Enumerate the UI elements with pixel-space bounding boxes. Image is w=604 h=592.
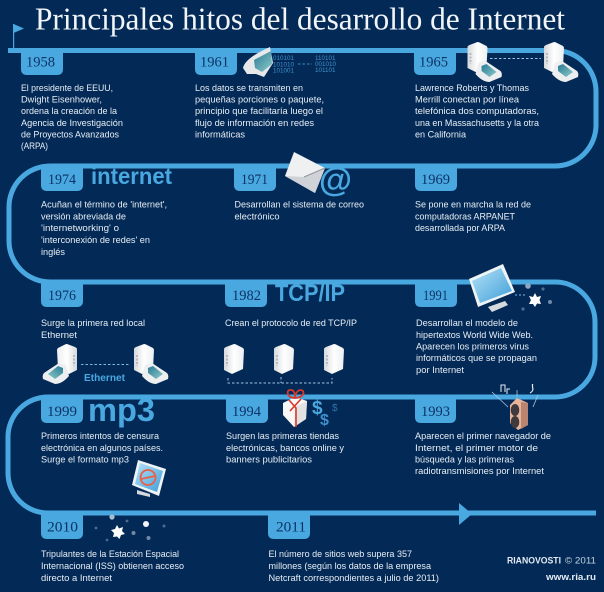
text block 1969: Se pone en marcha la red de bbox=[415, 200, 531, 210]
text block 1976: Surge la primera red local bbox=[41, 318, 145, 329]
text block 1993 bbox=[415, 431, 551, 477]
text block 1991: Aparecen los primeros virus bbox=[416, 342, 529, 352]
text block 1994: banners publicitarios bbox=[226, 454, 312, 466]
text block 2010: directo a Internet bbox=[41, 573, 112, 584]
text block 1958: Dwight Eisenhower, bbox=[21, 94, 102, 106]
credit: RIA Novosti: © 2011 bbox=[565, 556, 596, 566]
year tab 2010 bbox=[41, 513, 83, 539]
text block 1961: pequeñas porciones o paquete, bbox=[195, 94, 324, 106]
title: Principales hitos del desarrollo de Internet bbox=[35, 2, 565, 36]
panel: 1994 bbox=[226, 390, 344, 466]
icon: two connected computers bbox=[468, 42, 578, 82]
text block 1958: El presidente de EEUU, bbox=[21, 83, 113, 94]
icon: computer with binary data: 110101 bbox=[315, 55, 336, 62]
icon: flag bbox=[13, 24, 24, 49]
text block 1958 bbox=[21, 83, 123, 152]
panel: 1982 bbox=[224, 280, 357, 383]
year tab 1965: 1965 bbox=[419, 54, 448, 70]
text block 1958: Agencia de Investigación bbox=[21, 118, 123, 129]
text block 1974: versión abreviada de bbox=[41, 212, 126, 222]
text block 1965: una en Massachusetts y la otra bbox=[415, 118, 540, 129]
panel: 1958 bbox=[21, 50, 123, 152]
word: TCP/IP: TCP/IP bbox=[275, 280, 345, 307]
panel: 2010 bbox=[41, 513, 184, 584]
year tab 1961 bbox=[195, 50, 237, 75]
text block 1994: electrónicas, bancos online y bbox=[226, 443, 344, 454]
panel: 1971 bbox=[234, 152, 364, 222]
text block 1994 bbox=[226, 431, 344, 466]
text block 1991: por Internet bbox=[416, 365, 464, 376]
word: mp3: mp3 bbox=[88, 392, 155, 428]
panel: 1965 bbox=[414, 42, 578, 140]
icon: three servers bbox=[224, 344, 344, 383]
panel: 1969 bbox=[415, 166, 531, 234]
text block 1961: flujo de información en redes bbox=[195, 118, 314, 129]
text block 1999: electrónica en algunos países. bbox=[41, 443, 163, 454]
icon: gift box bbox=[283, 390, 307, 427]
text block 2010: Internacional (ISS) obtienen acceso bbox=[41, 561, 184, 572]
text block 1976: Ethernet bbox=[41, 330, 77, 341]
text block 1993: Internet, el primer motor de bbox=[415, 443, 538, 454]
icon: dollar signs bbox=[312, 398, 338, 429]
text block 1969: desarrollada por ARPA bbox=[415, 223, 506, 234]
text block 1976 bbox=[41, 318, 145, 341]
text block 1993: Aparecen el primer navegador de bbox=[415, 431, 551, 442]
panel: 1976 bbox=[41, 282, 168, 384]
icon: dollar signs: $ bbox=[332, 403, 338, 414]
text block 1991: Desarrollan el modelo de bbox=[416, 318, 518, 329]
word: internet: internet bbox=[91, 163, 172, 189]
text block 1965: en California bbox=[415, 130, 467, 140]
text block 1965 bbox=[415, 83, 540, 140]
text block 2010: Tripulantes de la Estación Espacial bbox=[41, 549, 179, 560]
icon: monitor with virus bbox=[469, 264, 552, 312]
text block 1982: Crean el protocolo de red TCP/IP bbox=[225, 318, 357, 329]
text block 1961: informáticas bbox=[195, 130, 245, 140]
icon: computer with binary data: 010101 bbox=[273, 55, 295, 62]
year tab 1976: 1976 bbox=[48, 288, 76, 304]
text block 1974: inglés bbox=[41, 247, 65, 258]
text block 2011: millones (según los datos de la empresa bbox=[268, 561, 432, 572]
year tab 1999: 1999 bbox=[47, 404, 77, 420]
text block 2011: Netcraft correspondientes a julio de 2011) bbox=[268, 573, 439, 584]
text block 1965: Merrill conectan por línea bbox=[415, 94, 520, 106]
text block 1961 bbox=[195, 83, 324, 140]
year tab 2011: 2011 bbox=[276, 520, 306, 536]
year tab 1974: 1974 bbox=[48, 172, 76, 188]
icon: speaker with notes bbox=[492, 384, 538, 430]
icon: dollar signs: $ bbox=[312, 398, 323, 419]
text block 1965: telefónica dos computadoras, bbox=[415, 106, 539, 117]
year tab 1991: 1991 bbox=[423, 288, 448, 304]
text block 2010 bbox=[41, 549, 184, 584]
text block 1993: búsqueda y las primeras bbox=[415, 454, 514, 466]
icon: censored monitor bbox=[132, 460, 166, 497]
credit: RIA Novosti: RIANOVOSTI bbox=[507, 556, 561, 566]
icon: space stars bbox=[95, 514, 166, 541]
year tab 2010: 2010 bbox=[47, 520, 78, 536]
icon: computer with binary data: 101101 bbox=[315, 67, 336, 74]
text block 1999 bbox=[41, 431, 163, 466]
text block 1958: de Proyectos Avanzados bbox=[21, 130, 119, 140]
icon: computer with binary data: 101001 bbox=[273, 68, 295, 74]
year tab 1994: 1994 bbox=[232, 404, 261, 420]
text block 1974: Acuñan el término de 'internet', bbox=[41, 200, 167, 210]
year tab 1971: 1971 bbox=[241, 172, 268, 188]
panel: 2011 bbox=[268, 513, 439, 584]
text block 2011 bbox=[268, 549, 439, 584]
text block 1969 bbox=[415, 200, 531, 234]
panel: 1961 bbox=[195, 47, 337, 140]
icon: dollar signs: $ bbox=[320, 412, 329, 429]
text block 1965: Lawrence Roberts y Thomas bbox=[415, 83, 529, 94]
icon: computer with binary data: 101010 bbox=[273, 62, 295, 68]
text block 1993: radiotransmisiones por Internet bbox=[415, 466, 544, 477]
panel: 1999 bbox=[41, 392, 166, 497]
text block 1961: principio que facilitaría luego el bbox=[195, 106, 323, 117]
text block 1958: ordena la creación de la bbox=[21, 106, 118, 117]
credit: RIA Novosti: www.ria.ru bbox=[545, 572, 596, 583]
year tab 1993: 1993 bbox=[421, 404, 450, 420]
text block 1991: hipertextos World Wide Web. bbox=[416, 330, 533, 341]
text block 1991 bbox=[416, 318, 537, 376]
text block 1971: electrónico bbox=[234, 212, 280, 222]
year tab 1958: 1958 bbox=[26, 54, 55, 70]
panel: 1974 bbox=[41, 163, 172, 258]
text block 1971: Desarrollan el sistema de correo bbox=[234, 200, 364, 210]
year tab 2011 bbox=[268, 513, 310, 539]
text block 1974 bbox=[41, 200, 167, 258]
text block 1994: Surgen las primeras tiendas bbox=[226, 431, 339, 442]
text block 1999: Primeros intentos de censura bbox=[41, 431, 160, 442]
text block 1958: (ARPA) bbox=[21, 141, 48, 152]
text block 1991: informáticos que se propagan bbox=[416, 353, 537, 364]
text block 1999: Surge el formato mp3 bbox=[41, 454, 129, 466]
year tab 1969: 1969 bbox=[421, 172, 450, 188]
year tab 1961: 1961 bbox=[200, 54, 229, 70]
text block 1961: Los datos se transmiten en bbox=[195, 83, 303, 94]
year tab 1965 bbox=[414, 50, 456, 75]
icon: computer with binary data: 001010 bbox=[315, 61, 337, 68]
panel: 1993 bbox=[415, 384, 551, 477]
timeline path bbox=[8, 50, 596, 513]
text block 1971 bbox=[234, 200, 364, 222]
word: at sign: @ bbox=[319, 161, 352, 198]
text block 1974: 'internetworking' o bbox=[41, 223, 119, 234]
icon: computer with binary data bbox=[243, 47, 337, 77]
text block 1969: computadoras ARPANET bbox=[415, 212, 515, 222]
panel: 1991 bbox=[415, 264, 552, 376]
text block 2011: El número de sitios web supera 357 bbox=[268, 549, 412, 560]
year tab 1982: 1982 bbox=[232, 288, 261, 304]
text block 1974: 'interconexión de redes' en bbox=[41, 235, 150, 246]
arrow bbox=[459, 503, 472, 525]
credit: RIA Novosti bbox=[507, 556, 596, 583]
icon: envelope bbox=[285, 152, 325, 193]
icon: ethernet network: Ethernet bbox=[84, 372, 125, 384]
